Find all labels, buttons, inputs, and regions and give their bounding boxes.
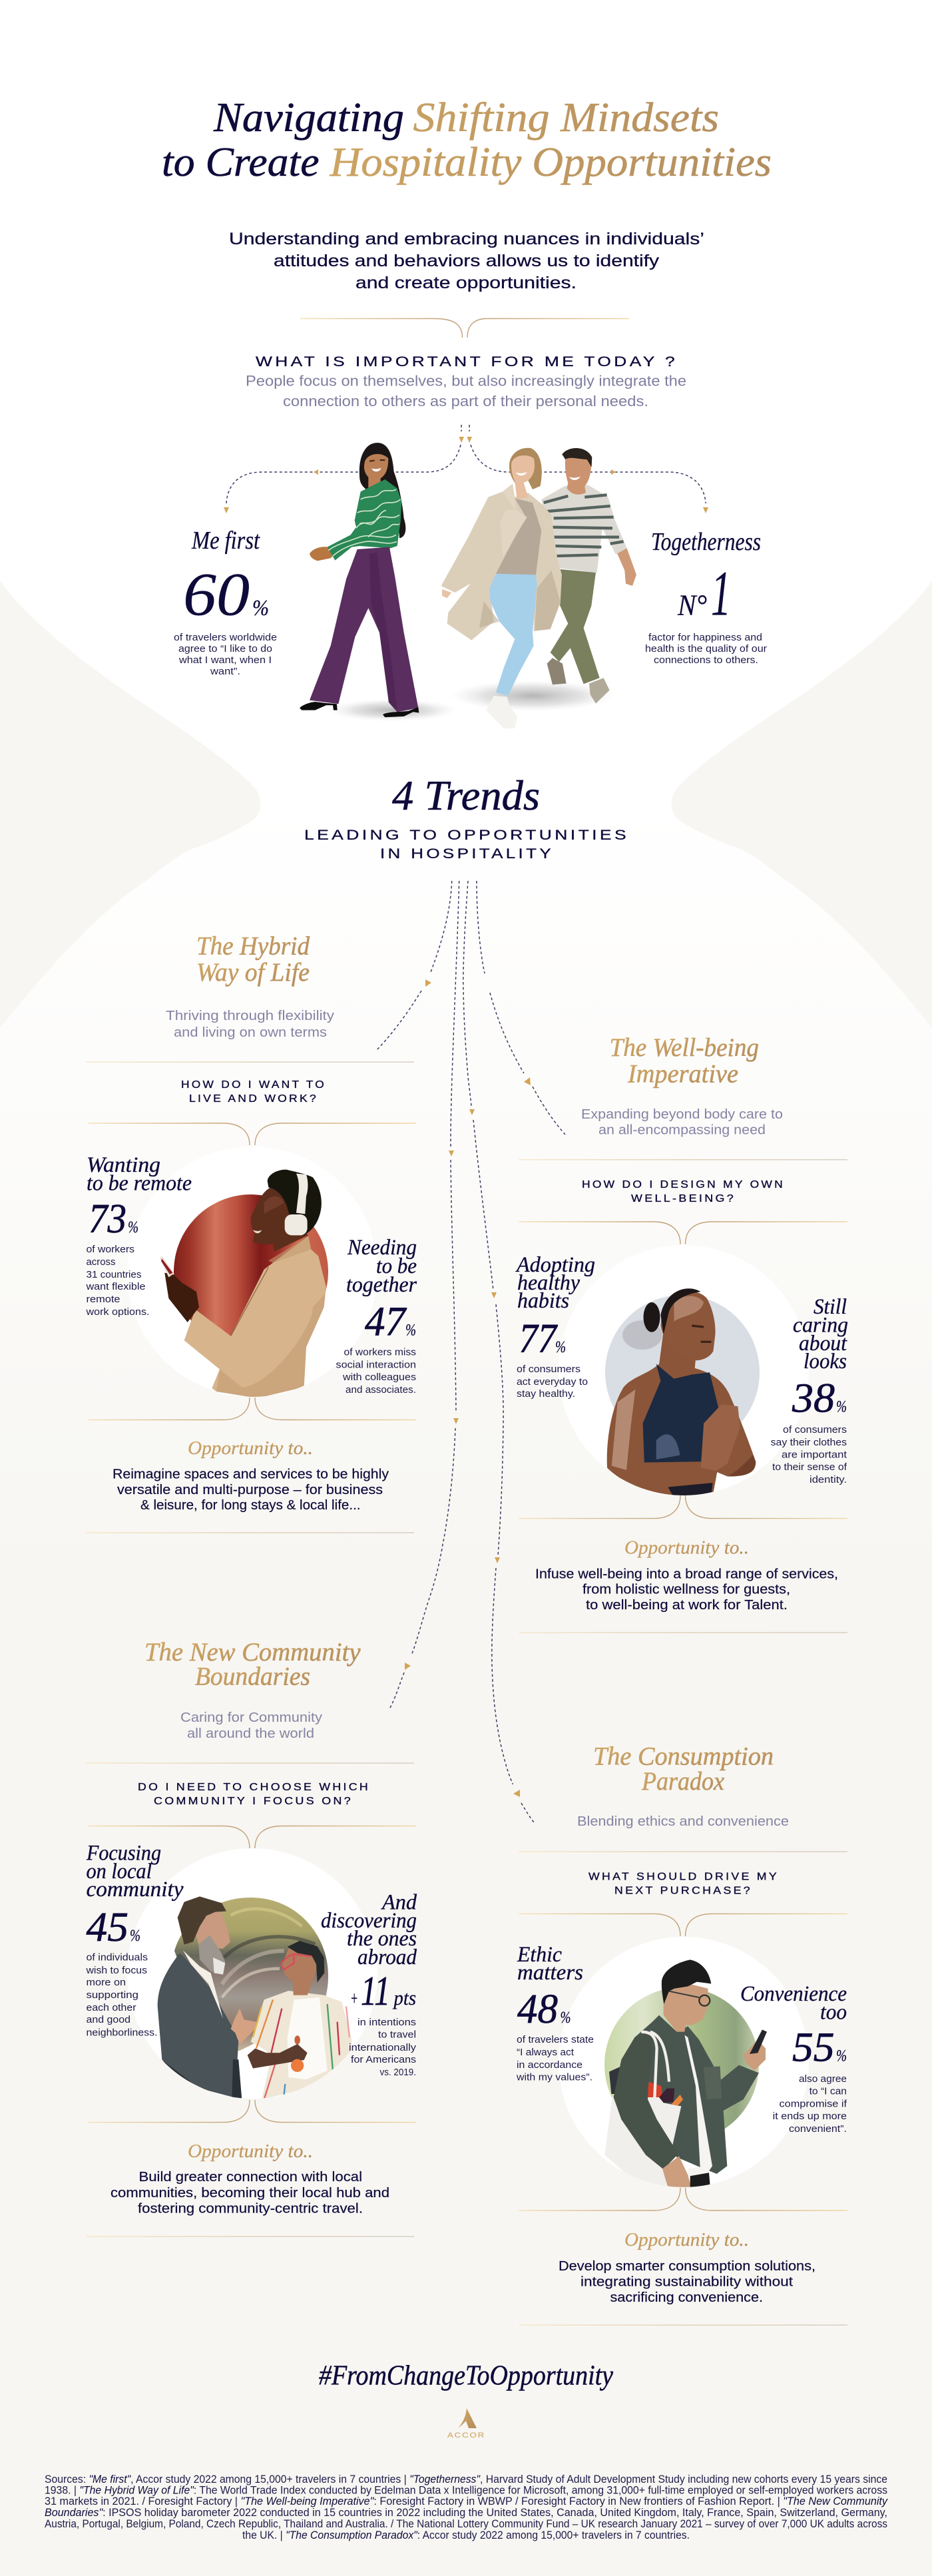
bracket top [519,1914,847,1936]
title: Navigating [213,95,404,140]
trend heading: The Well-being [610,1033,759,1062]
stat: still caring about looks: about [799,1332,847,1356]
stat: wanting to be remote: % [128,1218,138,1236]
stat: still caring about looks: say their clothes [771,1437,847,1448]
trend heading: The Consumption [593,1742,774,1771]
stat: adopting healthy habits: act everyday to [517,1376,588,1388]
stat: togetherness: N° [677,589,707,622]
stat: focusing on local community: community [87,1878,184,1902]
stat: convenience too: Convenience [740,1982,847,2006]
arrow: to well-being imperative [477,881,565,1135]
opportunity: Develop smarter consumption solutions, [559,2259,816,2274]
stat: togetherness: connections to others. [654,654,758,666]
stat: ethic matters [516,1943,594,2083]
stat: and discovering the ones abroad: to travel [378,2029,416,2041]
arrows: split to me first and togetherness [224,425,708,513]
stat: and discovering the ones abroad: pts [393,1986,416,2009]
stat: and discovering the ones abroad: 11 [361,1969,390,2014]
stat: and discovering the ones abroad: in intentions [357,2017,416,2028]
stat: togetherness: health is the quality of our [645,643,767,654]
stat: and discovering the ones abroad [321,1891,417,2078]
intro text: attitudes and behaviors allows us to identify [274,252,660,270]
question: LIVE AND WORK? [189,1093,318,1105]
title: Hospitality Opportunities [329,140,772,185]
stat: and discovering the ones abroad: And [381,1891,417,1915]
question [181,1079,326,1105]
stat: me first: of travelers worldwide [174,632,277,643]
title: to Create [162,140,320,185]
stat: ethic matters: “I always act [517,2047,575,2058]
question: HOW DO I WANT TO [181,1079,326,1091]
sources [45,2473,889,2541]
trend description: all around the world [187,1726,314,1741]
trend heading: Boundaries [195,1663,310,1691]
stat: still caring about looks [771,1295,848,1485]
stat: focusing on local community: 45 [87,1905,128,1950]
opportunity: Opportunity to.. [624,1537,749,1558]
stat: wanting to be remote: remote [87,1294,120,1305]
illustration: woman in trench coat and jeans [441,448,562,728]
logo: accor: ACCOR [447,2432,485,2440]
stat: needing to be together: Needing [347,1236,417,1260]
stat: still caring about looks: are important [782,1449,847,1460]
stat: still caring about looks: looks [804,1350,847,1374]
stat: still caring about looks: % [836,1398,847,1416]
illustration: shadows under the walkers [328,680,614,721]
bracket bottom [89,2100,416,2123]
trend description [180,1710,322,1741]
stat: needing to be together: and associates. [346,1384,416,1396]
stat: convenience too: compromise if [779,2099,847,2110]
trend description [581,1107,783,1137]
stat: focusing on local community: wish to focus [85,1965,147,1976]
intro text: and create opportunities. [355,274,577,292]
stat: still caring about looks: caring [793,1314,848,1338]
stat: ethic matters: 48 [517,1987,558,2032]
opportunity [111,2141,389,2216]
opportunity: Opportunity to.. [188,2141,313,2162]
stat: convenience too: % [836,2047,847,2065]
panel: the hybrid way of life [85,932,417,1533]
stat: me first: what I want, when I [178,654,272,666]
opportunity: integrating sustainability without [581,2275,793,2290]
title: Shifting Mindsets [413,95,719,140]
stat: adopting healthy habits: % [555,1338,566,1356]
stat: ethic matters: Ethic [517,1943,562,1967]
stat: adopting healthy habits: stay healthy. [517,1388,575,1400]
trend heading [144,1638,361,1691]
heading: what is important: WHAT IS IMPORTANT FOR ME TODAY ? [256,354,678,370]
stat: convenience too: also agree [799,2073,847,2085]
trend heading: The Hybrid [196,932,310,960]
stat: focusing on local community: of individuals [87,1952,148,1963]
sources: 1938. | "The Hybrid Way of Life": The World Trade Index conducted by Edelman Data x Intelligence for Microsoft, among 31,000+ full-time employed or self-employed workers across [45,2485,887,2497]
stat: focusing on local community [85,1842,184,2039]
stat: focusing on local community: % [130,1927,140,1945]
opportunity: Opportunity to.. [188,1437,313,1459]
intro text: Understanding and embracing nuances in individuals’ [229,230,704,248]
stat: adopting healthy habits [515,1253,595,1400]
stat: and discovering the ones abroad: discovering [321,1909,417,1933]
stat: ethic matters: matters [517,1961,583,1985]
opportunity: Infuse well-being into a broad range of services, [535,1567,838,1582]
question: WELL-BEING? [631,1193,736,1204]
stat: focusing on local community: on local [87,1860,152,1884]
stat: wanting to be remote: of workers [87,1244,134,1255]
stat: needing to be together: to be [376,1254,417,1278]
bracket top [519,1222,847,1244]
stat: convenience too: to “I can [810,2085,847,2097]
stat: and discovering the ones abroad: vs. 2019. [379,2067,416,2078]
trend description: an all-encompassing need [598,1123,766,1137]
stat: me first: 60 [183,561,250,629]
opportunity: sacrificing convenience. [610,2290,763,2305]
stat: convenience too: convenient”. [789,2123,847,2135]
stat: focusing on local community: supporting [87,1989,138,2001]
trend description [166,1009,334,1040]
logo: accor [447,2408,485,2440]
stat: and discovering the ones abroad: abroad [357,1945,417,1969]
stat: wanting to be remote: 31 countries [87,1269,141,1280]
arrow: to hybrid way of life [376,881,452,1051]
trend heading: Imperative [627,1060,738,1089]
opportunity: & leisure, for long stays & local life... [140,1498,361,1513]
heading: 4 trends [304,772,629,862]
bracket bottom [89,1398,416,1419]
trend heading [593,1742,774,1796]
question [138,1782,370,1807]
stat: togetherness: factor for happiness and [648,632,762,643]
bracket top [89,1123,416,1145]
trend description: Caring for Community [180,1710,322,1725]
stat: wanting to be remote: to be remote [87,1172,192,1196]
trend description: Expanding beyond body care to [581,1107,783,1122]
trend heading [196,932,310,987]
photo: man with headphones [130,1169,374,1397]
stat: adopting healthy habits: of consumers [517,1364,581,1375]
opportunity [535,1537,838,1613]
stat: me first [174,527,277,677]
trend heading [610,1033,759,1089]
opportunity: Build greater connection with local [138,2170,362,2185]
stat: still caring about looks: to their sense of [772,1461,847,1473]
opportunity: fostering community-centric travel. [138,2201,363,2216]
trend description: Thriving through flexibility [166,1009,334,1023]
stat: focusing on local community: Focusing [86,1842,161,1866]
stat: convenience too [740,1982,847,2135]
panel: the well-being imperative [515,1033,848,1633]
sources: Austria, Portugal, Belgium, Poland, Czech Republic, Thailand and Australia. / The National Lottery Community Fund – UK research January 2021 – survey of over 7,000 UK adults across [45,2518,887,2530]
question [582,1179,785,1204]
stat: adopting healthy habits: healthy [517,1271,580,1295]
hashtag: #FromChangeToOpportunity [319,2361,613,2392]
stat: me first: Me first [191,527,260,555]
stat: ethic matters: with my values”. [516,2071,592,2083]
stat: wanting to be remote: across [87,1256,116,1268]
stat: wanting to be remote: want flexible [85,1281,145,1292]
stat: togetherness [645,528,767,666]
stat: needing to be together [336,1236,417,1396]
stat: wanting to be remote: work options. [85,1306,149,1318]
sources: the UK. | "The Consumption Paradox": Accor study 2022 among 15,000+ travelers in 7 countries. [242,2529,690,2541]
stat: focusing on local community: each other [87,2002,136,2013]
opportunity: versatile and multi-purpose – for business [117,1483,383,1497]
panel: the consumption paradox [516,1742,847,2326]
stat: needing to be together: % [405,1322,416,1340]
stat: convenience too: too [820,2001,847,2025]
sources: Sources: "Me first", Accor study 2022 among 15,000+ travelers in 7 countries | "Togetherness", Harvard Study of Adult Development Study including new cohorts every 15 years since [45,2473,887,2485]
question: COMMUNITY I FOCUS ON? [154,1796,353,1807]
arrow: to consumption paradox [463,881,534,1822]
bracket top [89,1826,416,1848]
opportunity: from holistic wellness for guests, [582,1582,790,1597]
panel: the new community boundaries [85,1638,417,2237]
stat: and discovering the ones abroad: + [350,1987,358,2009]
stat: adopting healthy habits: 77 [519,1316,559,1362]
question: NEXT PURCHASE? [614,1885,752,1896]
stat: focusing on local community: more on [87,1977,126,1988]
stat: and discovering the ones abroad: the ones [347,1927,417,1951]
stat: still caring about looks: Still [814,1295,847,1319]
title [162,95,772,185]
stat: ethic matters: of travelers state [517,2034,594,2045]
stat: ethic matters: in accordance [517,2059,582,2071]
heading: 4 trends: IN HOSPITALITY [380,846,554,862]
question: DO I NEED TO CHOOSE WHICH [138,1782,370,1793]
stat: ethic matters: % [561,2009,571,2027]
stat: still caring about looks: identity. [810,1474,847,1485]
opportunity [113,1437,389,1513]
text: people focus: People focus on themselves, but also increasingly integrate the [246,373,686,389]
stat: togetherness: Togetherness [651,528,761,556]
stat: convenience too: 55 [792,2025,835,2071]
stat: me first: % [252,596,269,621]
stat: and discovering the ones abroad: internationally [349,2042,417,2053]
stat: needing to be together: of workers miss [344,1347,416,1358]
photo: man with tote bag and phone [559,1937,809,2188]
opportunity: to well-being at work for Talent. [586,1598,788,1613]
illustration: man in striped sweater [541,448,636,704]
stat: focusing on local community: and good [87,2014,130,2025]
stat: still caring about looks: of consumers [783,1424,847,1435]
heading: 4 trends: 4 Trends [392,772,540,819]
stat: adopting healthy habits: Adopting [515,1253,595,1277]
opportunity: communities, becoming their local hub and [111,2186,389,2200]
illustration: woman in green shirt and purple trousers [300,443,419,717]
sources: 31 markets in 2021. / Foresight Factory | "The Well-being Imperative": Foresight Factory in WBWP / Foresight Factory in New frontiers of Fashion Report. | "The New Community [45,2495,889,2507]
stat: me first: want”. [210,666,240,677]
stat: wanting to be remote [85,1153,192,1318]
sources: Boundaries": IPSOS holiday barometer 2022 conducted in 15 countries in 2022 including the United States, Canada, United Kingdom, Italy, France, Spain, Switzerland, Germany, [45,2507,887,2519]
photo: woman meditating [559,1288,809,1495]
stat: focusing on local community: neighborliness. [87,2027,157,2039]
stat: me first: agree to “I like to do [178,643,272,654]
text: people focus: connection to others as part of their personal needs. [283,393,648,409]
stat: needing to be together: 47 [365,1300,407,1345]
question: WHAT SHOULD DRIVE MY [588,1871,779,1882]
stat: and discovering the ones abroad: for Americans [351,2054,416,2065]
heading: 4 trends: LEADING TO OPPORTUNITIES [304,828,629,843]
trend heading: Way of Life [196,958,310,987]
opportunity: Opportunity to.. [624,2229,749,2250]
opportunity: Reimagine spaces and services to be highly [113,1467,389,1482]
arrow: to new community boundaries [389,881,459,1709]
question [588,1871,779,1896]
trend description: and living on own terms [174,1025,327,1040]
text: people focus [246,373,686,409]
stat: needing to be together: social interaction [336,1360,416,1371]
bracket bottom [519,2188,847,2210]
stat: togetherness: 1 [711,558,731,629]
intro text [229,230,704,292]
stat: wanting to be remote: Wanting [87,1153,160,1177]
stat: wanting to be remote: 73 [89,1196,126,1242]
opportunity [559,2229,816,2305]
stat: still caring about looks: 38 [792,1376,835,1421]
trend heading: Paradox [641,1767,725,1796]
trend description: Blending ethics and convenience [577,1814,789,1829]
bracket: intro [300,318,629,338]
stat: needing to be together: together [346,1273,417,1297]
bracket bottom [519,1495,847,1519]
photo: two people talking [127,1848,377,2099]
stat: needing to be together: with colleagues [342,1372,416,1383]
question: HOW DO I DESIGN MY OWN [582,1179,785,1190]
trend heading: The New Community [144,1638,361,1667]
stat: adopting healthy habits: habits [517,1289,569,1313]
stat: convenience too: it ends up more [773,2111,847,2122]
